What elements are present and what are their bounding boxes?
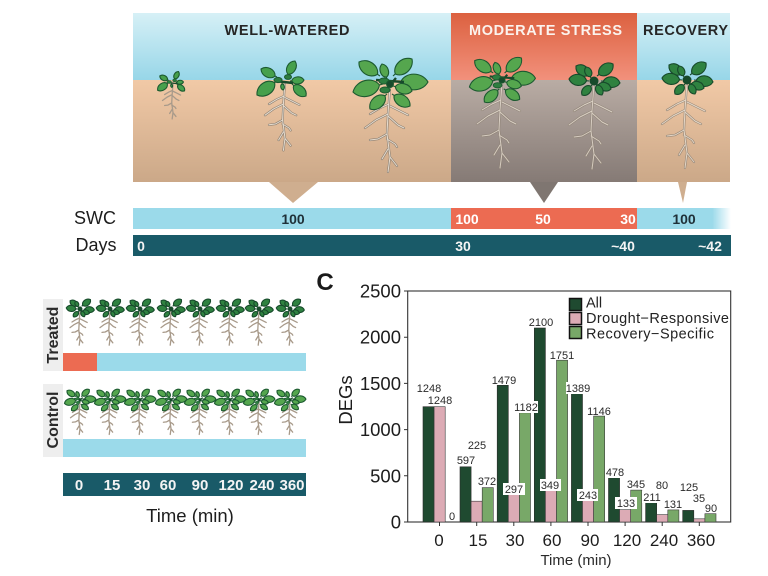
- Days bar: ~40: [611, 238, 635, 254]
- time point bar: 90: [192, 477, 208, 494]
- value labels: 297: [505, 484, 523, 496]
- SWC bar: 100: [455, 211, 479, 227]
- icon: stressed plant late: [568, 60, 621, 169]
- time point bar: [63, 473, 306, 496]
- heading: recovery: RECOVERY: [643, 23, 728, 39]
- x axis labels: 360: [687, 531, 715, 550]
- Days bar: Days: [75, 235, 117, 255]
- value labels: 1248: [428, 395, 452, 407]
- SWC bar: 30: [620, 211, 636, 227]
- value labels: 597: [457, 455, 475, 467]
- Days bar: 30: [455, 238, 471, 254]
- value labels: 0: [449, 511, 455, 523]
- x axis labels: 240: [650, 531, 678, 550]
- panel: sampling design: [43, 297, 306, 526]
- value labels: 478: [606, 467, 624, 479]
- panel label C: C: [316, 269, 334, 296]
- value labels: 35: [693, 493, 705, 505]
- SWC bar: 50: [535, 211, 551, 227]
- bars: [423, 328, 716, 522]
- heading: moderate stress: MODERATE STRESS: [469, 23, 622, 39]
- value labels: 1389: [566, 383, 590, 395]
- time point bar: 30: [134, 477, 150, 494]
- y axis labels: 0: [391, 512, 401, 532]
- value labels: 372: [478, 476, 496, 488]
- value labels: 1182: [514, 402, 538, 414]
- Days bar: [75, 235, 731, 256]
- y axis labels: 500: [370, 465, 401, 486]
- x axis labels: Time (min): [540, 552, 612, 569]
- x axis labels: 30: [506, 531, 524, 550]
- time axis title: Time (min): [146, 505, 234, 526]
- icon: medium seedling: [253, 59, 309, 150]
- legend: Recovery−Specific: [586, 326, 714, 342]
- value labels: 90: [705, 503, 717, 515]
- x axis labels: 15: [469, 531, 487, 550]
- treated row: [43, 297, 306, 371]
- value labels: 80: [656, 480, 668, 492]
- value labels: 1751: [550, 350, 574, 362]
- value labels: 2100: [529, 317, 553, 329]
- icon: recovered plant: [661, 59, 714, 168]
- time point bar: 15: [104, 477, 120, 494]
- y axis labels: 2000: [360, 327, 401, 348]
- control row: Control: [45, 392, 62, 448]
- value labels: 131: [664, 499, 682, 511]
- value labels: 1248: [417, 383, 441, 395]
- y axis labels: 2500: [360, 280, 401, 302]
- icon: stressed plant early: [468, 54, 535, 168]
- value labels: 133: [617, 498, 635, 510]
- Days bar: 0: [137, 238, 145, 254]
- legend: Drought−Responsive: [586, 311, 729, 327]
- panel: growth timeline illustration: [133, 13, 730, 203]
- bar chart: DEGs over time: [335, 280, 731, 569]
- SWC bar: 100: [281, 211, 305, 227]
- y axis labels: [335, 280, 408, 532]
- y axis labels: 1000: [360, 419, 401, 440]
- time point bar: 240: [249, 477, 275, 494]
- legend: [570, 296, 729, 342]
- time point bar: 0: [75, 477, 83, 494]
- SWC bar: 100: [672, 211, 696, 227]
- value labels: 345: [627, 479, 645, 491]
- time point bar: 120: [218, 477, 244, 494]
- value labels: 349: [541, 480, 559, 492]
- value labels: 225: [468, 440, 486, 452]
- legend: All: [586, 296, 602, 312]
- value labels: [417, 317, 717, 523]
- value labels: 125: [680, 482, 698, 494]
- x axis labels: 120: [613, 531, 641, 550]
- icon: small seedling: [156, 70, 186, 119]
- y axis labels: DEGs: [335, 375, 356, 425]
- panel: well-watered stage: [133, 13, 451, 203]
- x axis labels: [434, 522, 715, 569]
- control row: [43, 384, 306, 457]
- treated row: Treated: [45, 307, 62, 363]
- icon: large plant: [351, 54, 428, 172]
- SWC bar: SWC: [74, 208, 116, 228]
- SWC bar: [74, 208, 731, 229]
- time point bar: 60: [160, 477, 176, 494]
- heading: well-watered: WELL-WATERED: [224, 23, 350, 39]
- value labels: 243: [579, 490, 597, 502]
- value labels: 1479: [492, 375, 516, 387]
- x axis labels: 90: [581, 531, 599, 550]
- x axis labels: 0: [434, 531, 444, 550]
- time point bar: 360: [279, 477, 305, 494]
- x axis labels: 60: [543, 531, 561, 550]
- value labels: 1146: [587, 406, 611, 418]
- value labels: 211: [643, 492, 661, 504]
- y axis labels: 1500: [360, 373, 401, 394]
- panel: recovery stage: [637, 13, 730, 203]
- Days bar: ~42: [698, 238, 722, 254]
- panel: moderate stress stage: [451, 13, 637, 203]
